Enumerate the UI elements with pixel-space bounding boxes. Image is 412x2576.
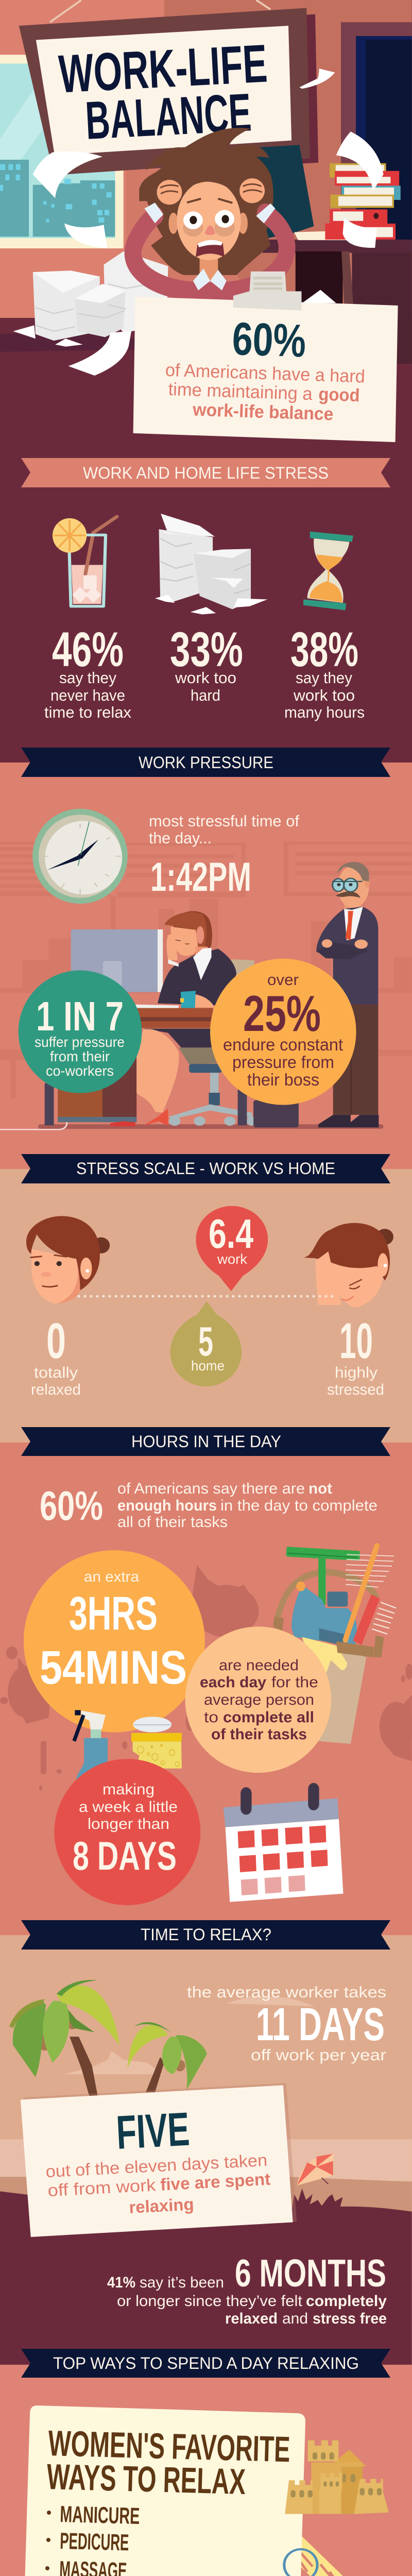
- title: WORK-LIFE: [57, 34, 269, 105]
- briefcase: [253, 1100, 299, 1127]
- 6 months text: or longer since they’ve felt: [117, 2293, 303, 2310]
- stat: 46%: 46%: [52, 622, 124, 677]
- ribbon: top ways: [21, 2349, 390, 2378]
- scale 10 highly stressed: [327, 1313, 384, 1398]
- clipboard card: [133, 272, 398, 442]
- 6 months text: stress free: [313, 2310, 387, 2327]
- each day text: each day: [200, 1674, 266, 1691]
- palm tree large: [9, 1980, 119, 2096]
- work pressure scene: [0, 809, 412, 1129]
- 11 days text: off work per year: [251, 2046, 386, 2064]
- 6 months text: completely: [306, 2293, 387, 2310]
- scale value 5 home: home: [191, 1358, 225, 1374]
- stat card text: 60%: [164, 311, 367, 426]
- floor: [0, 248, 412, 364]
- scale 0 totally relaxed: [31, 1313, 81, 1398]
- circle: 1 in 7: [19, 971, 142, 1093]
- women's list: PEDICURE: [60, 2528, 129, 2556]
- five card text: five are spent: [160, 2170, 271, 2194]
- stressed worker: [158, 911, 236, 1008]
- desk: [45, 1005, 247, 1125]
- 6 months text: say it’s been: [140, 2274, 224, 2291]
- scale value 6.4 work: [209, 1211, 253, 1267]
- beach scene: [0, 1980, 412, 2365]
- stat card text: 60%: time maintaining a: [168, 379, 313, 404]
- icon: beach umbrella: [297, 2154, 334, 2185]
- scale 10 highly stressed: stressed: [327, 1381, 384, 1398]
- women's card title: WOMEN'S FAVORITE: [48, 2423, 290, 2469]
- 8 days text: making: [102, 1781, 154, 1798]
- each day text: of their tasks: [211, 1726, 307, 1743]
- sea band: [0, 2139, 412, 2181]
- most stressful time: 1:42PM: [150, 854, 251, 900]
- icon: spray bottle: [74, 1710, 113, 1782]
- cable: [0, 1092, 67, 1129]
- ribbon: hours in the day: HOURS IN THE DAY: [131, 1432, 281, 1451]
- 1 in 7 text: [35, 993, 125, 1079]
- stat: 38%: many hours: [284, 703, 365, 721]
- icon: sandcastle: [285, 2441, 389, 2514]
- boss: [316, 862, 379, 1127]
- icon: paper stacks: [155, 514, 267, 614]
- 8 days text: 8 DAYS: [73, 1833, 177, 1878]
- paint splats: [0, 1565, 412, 1790]
- scale 0 totally relaxed: 0: [46, 1313, 66, 1369]
- ribbon: work and home life stress: WORK AND HOME LIFE STRESS: [83, 464, 329, 482]
- 6 months text: 41%: [107, 2274, 135, 2291]
- grass: [291, 2189, 343, 2213]
- icon: soap and sponge: [131, 1717, 182, 1769]
- circle: 8 days: [55, 1759, 200, 1905]
- five card text: [42, 2099, 272, 2221]
- stat: 46%: time to relax: [44, 703, 131, 721]
- relaxed face: [26, 1216, 110, 1304]
- stress icons: [53, 514, 353, 614]
- comb: [299, 2534, 356, 2576]
- floor line: [38, 1124, 384, 1129]
- stat: 38%: [284, 622, 365, 721]
- over 25% text: over: [267, 971, 299, 989]
- 60% not enough hours: [40, 1480, 377, 1531]
- women's card title: WAYS TO RELAX: [46, 2456, 246, 2502]
- women's card: [23, 2405, 305, 2576]
- each day text: for the: [271, 1674, 318, 1691]
- stat: 46%: never have: [50, 686, 125, 704]
- five card text: off from work: [47, 2175, 157, 2200]
- arms: [133, 213, 287, 291]
- scale value 6.4 work: work: [217, 1251, 247, 1267]
- each day text: [200, 1657, 318, 1743]
- background palms: [0, 2568, 412, 2576]
- women's card title: [46, 2423, 290, 2503]
- over 25% text: 25%: [243, 985, 321, 1042]
- 11 days text: the average worker takes: [187, 1983, 386, 2001]
- 60% not enough hours: 60%: [40, 1483, 103, 1529]
- scale value 5 home: 5: [198, 1318, 213, 1364]
- torso: [181, 282, 252, 300]
- stat: 33%: 33%: [170, 622, 243, 677]
- keyboard: [294, 231, 347, 240]
- 60% not enough hours: of Americans say there are: [117, 1480, 305, 1497]
- wall clock: [32, 809, 128, 904]
- scale 10 highly stressed: highly: [335, 1364, 377, 1381]
- stress scale illustrations: [26, 1206, 393, 1386]
- circle: 3hrs 54mins: [24, 1550, 205, 1732]
- women's list: [44, 2501, 177, 2576]
- most stressful time: most stressful time of: [149, 812, 299, 830]
- 60% not enough hours: all of their tasks: [117, 1514, 228, 1531]
- icon: calendar: [224, 1783, 344, 1902]
- ribbon: work and home life stress: [21, 458, 390, 487]
- title: [57, 34, 271, 152]
- scale 0 totally relaxed: relaxed: [31, 1381, 81, 1398]
- legs and shoes: [110, 1029, 213, 1126]
- stat card text: 60%: good: [318, 384, 360, 405]
- ribbon: time to relax: [21, 1920, 390, 1950]
- 60% not enough hours: not: [308, 1480, 332, 1497]
- 6 months text: [107, 2251, 387, 2327]
- each day text: to: [204, 1709, 218, 1726]
- five card text: FIVE: [115, 2103, 191, 2159]
- 8 days text: [73, 1781, 178, 1878]
- stat: 33%: hard: [191, 686, 220, 704]
- stat: 33%: work too: [175, 669, 236, 687]
- 8 days text: longer than: [88, 1816, 169, 1833]
- over 25% text: [223, 971, 343, 1089]
- 1 in 7 text: 1 IN 7: [36, 993, 124, 1039]
- door: [341, 22, 412, 240]
- women's list: MANICURE: [60, 2501, 140, 2529]
- face: [168, 180, 248, 260]
- pin: home 5: [170, 1301, 242, 1386]
- office scene: [0, 0, 412, 319]
- palm tree small: [127, 2022, 207, 2092]
- 6 months text: and: [282, 2310, 308, 2327]
- icon: cleaning basket: [273, 1546, 396, 1744]
- 1 in 7 text: from their: [50, 1048, 110, 1064]
- sign board: [36, 26, 291, 155]
- five card text: out of the eleven days taken: [45, 2150, 268, 2181]
- stat: 46%: [44, 622, 131, 721]
- stat: 33%: [170, 622, 243, 704]
- most stressful time: [149, 812, 299, 900]
- ribbon: time to relax: TIME TO RELAX?: [141, 1925, 271, 1944]
- wall: [0, 0, 412, 319]
- stat: 38%: work too: [293, 686, 355, 704]
- neck and collar: [193, 255, 227, 291]
- 3hrs 54mins text: an extra: [84, 1569, 140, 1585]
- ribbon: stress scale: [21, 1154, 390, 1183]
- ground: [0, 2191, 412, 2365]
- hands and cuffs: [144, 178, 275, 223]
- clouds: [64, 1996, 315, 2074]
- ribbon: work pressure: [21, 748, 390, 777]
- 60% not enough hours: enough hours: [117, 1497, 217, 1514]
- stat card text: 60%: 60%: [231, 313, 307, 367]
- background office: [0, 841, 412, 1098]
- circle: each day: [185, 1626, 331, 1773]
- scale 10 highly stressed: 10: [339, 1313, 373, 1369]
- 3hrs 54mins text: [40, 1569, 187, 1694]
- dotted scale: [79, 1295, 337, 1297]
- ribbon: stress scale: STRESS SCALE - WORK VS HOME: [76, 1159, 335, 1178]
- ribbon: work pressure: WORK PRESSURE: [139, 753, 273, 772]
- each day text: are needed: [219, 1657, 299, 1674]
- circle: over 25%: [210, 959, 356, 1105]
- flying papers: [13, 69, 384, 376]
- 1 in 7 text: co-workers: [46, 1063, 114, 1079]
- icon: hourglass: [303, 532, 353, 610]
- over 25% text: their boss: [247, 1070, 319, 1089]
- card shadow: [24, 2083, 297, 2236]
- scale value 6.4 work: 6.4: [209, 1211, 253, 1257]
- five card: [21, 2085, 293, 2237]
- 11 days text: [187, 1983, 386, 2064]
- hanging strings: [50, 0, 270, 22]
- 8 days text: a week a little: [79, 1799, 178, 1816]
- each day text: average person: [204, 1691, 314, 1708]
- chair: [168, 959, 258, 1126]
- stressed face: [303, 1223, 393, 1308]
- scale value 5 home: [191, 1318, 225, 1374]
- sign frame: [19, 8, 310, 175]
- 3hrs 54mins text: 54MINS: [40, 1641, 187, 1694]
- paper stacks: [33, 251, 168, 341]
- desk: [263, 240, 412, 304]
- icon: scissors: [231, 2549, 331, 2576]
- sign frame shadow: [263, 14, 318, 165]
- stat card text: 60%: work-life balance: [192, 400, 334, 425]
- stat card text: 60%: of Americans have a hard: [165, 360, 365, 387]
- stat: 38%: 38%: [290, 622, 358, 677]
- 1 in 7 text: suffer pressure: [35, 1034, 125, 1050]
- over 25% text: endure constant: [223, 1035, 343, 1054]
- over 25% text: pressure from: [232, 1053, 334, 1072]
- 60% not enough hours: in the day to complete: [220, 1497, 377, 1514]
- sand: [0, 2177, 412, 2216]
- hours illustrations: [0, 1546, 412, 1905]
- ribbon: hours in the day: [21, 1427, 390, 1456]
- five card text: relaxing: [129, 2194, 194, 2217]
- each day text: complete all: [223, 1709, 314, 1726]
- decorations on women's card: [31, 2441, 389, 2576]
- icon: cocktail: [53, 517, 117, 606]
- hair fringe: [172, 166, 248, 207]
- desk, monitor, books and woman: [0, 69, 412, 442]
- pin: work 6.4: [196, 1206, 268, 1291]
- 6 months text: relaxed: [225, 2310, 278, 2327]
- title: BALANCE: [84, 82, 253, 151]
- ribbon: top ways: TOP WAYS TO SPEND A DAY RELAXING: [53, 2354, 359, 2372]
- books: [325, 163, 401, 240]
- 3hrs 54mins text: 3HRS: [69, 1587, 158, 1640]
- stat: 38%: say they: [296, 669, 352, 687]
- monitor: [229, 145, 314, 240]
- window: [0, 55, 124, 248]
- monitor: [71, 929, 163, 992]
- scale 0 totally relaxed: totally: [34, 1364, 78, 1381]
- stat: 46%: say they: [59, 669, 116, 687]
- hair back: [139, 128, 273, 275]
- most stressful time: the day...: [149, 829, 212, 847]
